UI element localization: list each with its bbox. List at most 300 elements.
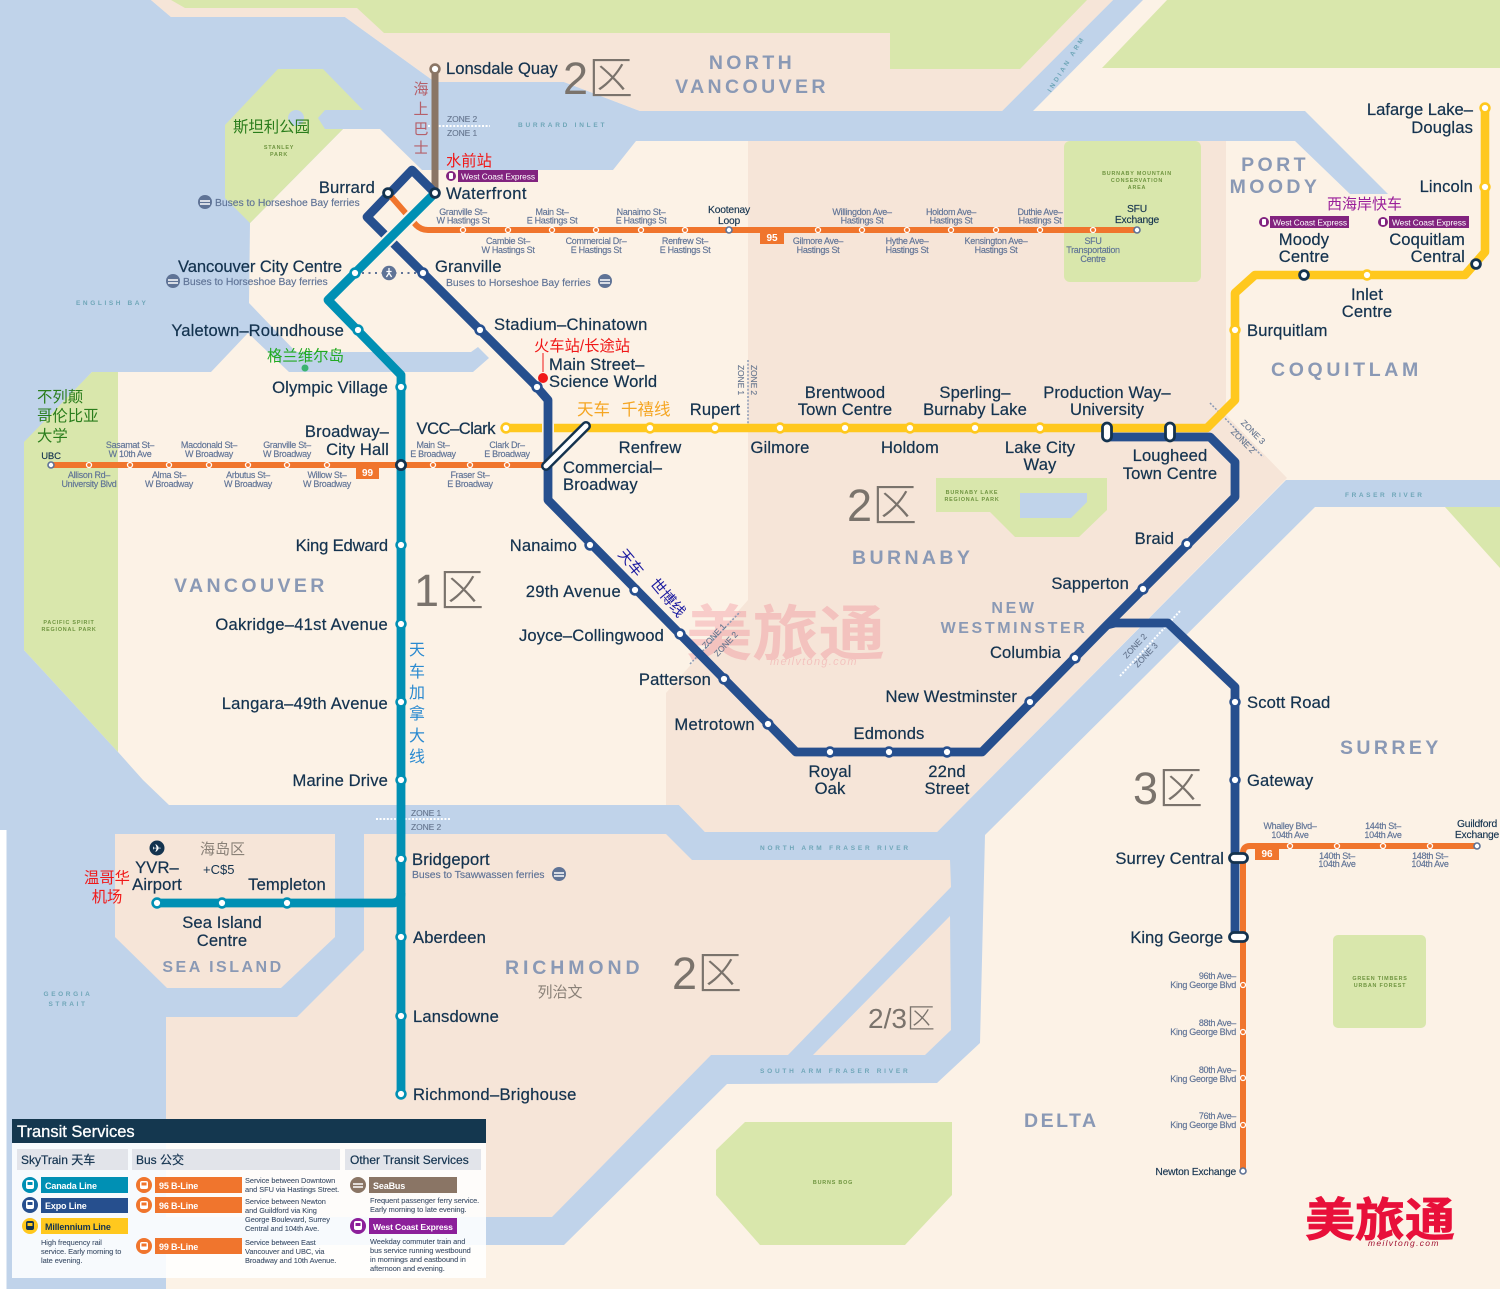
legend section headers: Other Transit Services [350,1153,469,1167]
park labels: REGIONAL PARK [944,497,1000,503]
stop labels: 95 B-Line: Hastings St [975,245,1018,255]
line name: Canada: 加 [409,684,425,702]
station names: Millennium Line: Inlet [1351,285,1383,304]
water labels: BURRARD INLET [518,122,607,129]
stations: Millennium [502,104,1489,432]
station names: Expo Line: Broadway [563,475,638,494]
route badges: 96 [1261,849,1273,860]
Chinese annotations: place names: 不列颠 [37,388,83,406]
station names: Millennium Line: Rupert [690,400,741,419]
Chinese annotation: SeaBus [413,81,429,157]
marker: Main Street train station [538,353,548,383]
zone labels: ZONE 1 [447,128,477,138]
stop labels: 95 B-Line: Renfrew St– [662,236,708,246]
line name: Millennium [577,400,670,419]
water labels: ENGLISH BAY [76,300,148,307]
station names: Expo Line: Metrotown [674,715,755,734]
zone labels: ZONE 3 [1239,418,1268,446]
station names: Canada Line: Olympic Village [272,378,388,397]
station names: Canada Line: YVR– [135,858,180,877]
Chinese annotations: place names: 大学 [37,427,68,445]
station: Commercial-Broadway capsule [546,426,586,466]
stop labels: 95 B-Line: E Hastings St [527,216,578,226]
station names: Canada Line: Bridgeport [412,850,490,869]
station: Lonsdale Quay terminal [431,65,439,73]
stop labels: 95 B-Line: Nanaimo St– [617,207,666,217]
legend section headers: Bus 公交 [136,1152,184,1167]
walking connection [362,266,416,280]
station names: Expo Line: Scott Road [1247,693,1330,712]
stop labels: 95 B-Line: W Hastings St [481,245,535,255]
legend: Bus: 95 B-Line [159,1181,198,1191]
stop labels: 99 B-Line: Granville St– [263,440,311,450]
zone labels: ZONE 3 [1132,640,1160,669]
line name: Millennium: 千禧线 [621,400,670,419]
Chinese annotations: place names: +C$5 [203,862,234,877]
crossing gap [378,207,421,250]
ferry bus notes: Buses to Horseshoe Bay ferries [183,277,328,288]
West Coast Express badges [446,170,1469,228]
station names: Canada Line: City Hall [326,440,389,459]
station names: Canada Line: Vancouver City Centre [178,257,342,276]
stop labels: 99 B-Line: Alma St– [152,470,186,480]
stop labels: 96 B-Line: 140th St– [1319,851,1355,861]
legend: Bus: Service between Downtown [245,1176,335,1185]
city district names: WESTMINSTER [941,620,1087,637]
stations: B-Line stops [86,228,1432,1128]
line: SeaBus [432,69,438,193]
stop labels: 99 B-Line: Fraser St– [450,470,490,480]
fare zone markers: 2/3区 [868,1003,935,1034]
stop labels: 99 B-Line: Allison Rd– [68,470,110,480]
station names: Expo Line: Science World [549,372,657,391]
park labels: AREA [1128,185,1146,191]
legend: SkyTrain: Canada Line [45,1181,97,1191]
station names: Millennium Line: Douglas [1411,118,1473,137]
station names: Expo Line [319,178,1330,947]
city district names: NEW [991,600,1037,617]
stop labels: 99 B-Line: Willow St– [307,470,347,480]
station names: Expo Line: Granville [435,257,502,276]
stop labels: 95 B-Line: Gilmore Ave– [793,236,843,246]
legend: other services: Frequent passenger ferry service. [370,1196,479,1205]
stop labels: 99 B-Line: W Broadway [224,479,273,489]
water labels: STRAIT [48,1001,88,1008]
city district names: COQUITLAM [1271,359,1422,381]
stop labels: 95 B-Line: Centre [1080,254,1106,264]
Chinese annotations: place names: 格兰维尔岛 [267,347,344,365]
line: Millennium [506,108,1485,428]
legend: Bus: and SFU via Hastings Street. [245,1185,339,1194]
zone labels: ZONE 1 [411,808,441,818]
park labels: STANLEY [264,145,294,151]
station names: Canada Line: Sea Island [182,913,262,932]
line: Expo [367,170,1235,937]
park labels: PACIFIC SPIRIT [43,620,95,626]
station names: Expo Line: Town Centre [1123,464,1217,483]
station names: Canada Line: Airport [132,875,182,894]
stop labels: 96 B-Line: King George Blvd [1170,1027,1236,1037]
zone labels: ZONE 2 [447,114,477,124]
route badges [356,231,1279,860]
municipal land: darker districts [115,0,1287,1217]
stop labels: 96 B-Line: King George Blvd [1170,1074,1236,1084]
stop labels: 95 B-Line: Cambie St– [486,236,530,246]
station names: Canada Line: Templeton [248,875,326,894]
stop labels: 96 B-Line: 104th Ave [1271,830,1309,840]
zone labels: ZONE 2 [1229,427,1258,455]
city district names: VANCOUVER [675,76,829,98]
station names: Millennium Line: Centre [1342,302,1392,321]
water labels: GEORGIA [44,991,92,998]
park labels: CONSERVATION [1111,178,1163,184]
water labels: NORTH ARM FRASER RIVER [760,845,911,852]
station names: Expo Line: Burrard [319,178,375,197]
marker: Granville Island [302,364,308,372]
Chinese annotation: SeaBus: 海 [413,81,429,98]
stop labels: 95 B-Line: Kootenay [708,205,751,216]
stop labels: 95 B-Line: Hastings St [886,245,929,255]
line name: Canada: 大 [409,727,425,745]
station names: Millennium Line: Way [1024,455,1057,474]
Chinese annotation: SeaBus: 士 [413,140,429,157]
city district names: RICHMOND [505,957,643,979]
zone labels [411,114,1268,832]
stop labels: 95 B-Line: Transportation [1066,245,1120,255]
zone labels: ZONE 1 [700,621,728,650]
stations: interchanges [384,189,1480,942]
legend heading [12,1119,486,1143]
city district names [162,52,1442,1132]
legend: Bus: George Boulevard, Surrey [245,1215,330,1224]
city district names: SEA ISLAND [162,959,284,976]
station names: Millennium Line: Lake City [1005,438,1076,457]
logo: 美旅通 [1305,1194,1455,1246]
station names: Canada Line: Lansdowne [413,1007,499,1026]
station names: Millennium Line: Production Way– [1043,383,1171,402]
stop labels: 96 B-Line: 148th St– [1412,851,1448,861]
line name: Expo: 世博线 [646,575,688,621]
legend: SkyTrain: Expo Line [45,1201,87,1211]
station names: Expo Line: King George [1130,928,1223,947]
stop labels: 99 B-Line [41,440,531,489]
fare zone markers: 2区 [672,948,742,999]
water labels: INDIAN ARM [1047,35,1087,94]
icon: airport plane: ✈ [152,842,162,855]
legend heading: Transit Services [17,1123,135,1141]
stop labels: 96 B-Line: 76th Ave– [1199,1111,1236,1121]
Chinese annotations: place names: 海岛区 [200,841,245,858]
station names: Expo Line: Oak [815,779,846,798]
station names: Expo Line: Patterson [639,670,711,689]
legend: SkyTrain: High frequency rail [41,1238,102,1247]
stop labels: 95 B-Line: E Hastings St [660,245,711,255]
water labels [44,35,1425,1075]
station names: Expo Line: Columbia [990,643,1062,662]
icon: airport plane [150,840,164,856]
station names: Canada Line: Centre [197,931,247,950]
legend: Bus: Service between Newton [245,1197,326,1206]
stop labels: 95 B-Line: Duthie Ave– [1017,207,1063,217]
station names: Millennium Line: Coquitlam [1389,230,1465,249]
stop labels: 96 B-Line: 80th Ave– [1199,1065,1236,1075]
legend: Bus: Broadway and 10th Avenue. [245,1256,336,1265]
line name: Expo [614,546,688,621]
station names: Millennium Line: VCC–Clark [416,419,496,438]
station names: Millennium Line: Central [1411,247,1465,266]
stop labels: 96 B-Line: 96th Ave– [1199,971,1236,981]
station names: Expo Line: 29th Avenue [526,582,621,601]
legend: Bus: and Guildford via King [245,1206,317,1215]
stop labels: 96 B-Line: Exchange [1455,830,1500,841]
legend: other services [350,1177,479,1273]
stop labels: 95 B-Line: SFU [1127,204,1147,215]
fare zone markers: 2区 [847,480,917,531]
stop labels: 95 B-Line: Holdom Ave– [926,207,976,217]
stop labels: 95 B-Line: Exchange [1115,215,1160,226]
stop labels: 96 B-Line: 104th Ave [1411,859,1449,869]
legend: Bus [136,1176,339,1265]
line name: Expo: 天车 [614,546,647,580]
line: Canada [157,193,435,1094]
station names: Millennium Line: Burquitlam [1247,321,1328,340]
station names: Canada Line: Broadway– [305,422,390,441]
station names: Millennium Line: Lincoln [1420,177,1473,196]
station names: Canada Line: Marine Drive [292,771,388,790]
station names: Expo Line: Commercial– [563,458,663,477]
legend: other services: West Coast Express [373,1222,453,1232]
station names: Millennium Line: University [1070,400,1145,419]
West Coast Express badges: West Coast Express [1273,218,1347,228]
line name: Millennium: 天车 [577,400,610,419]
stop labels: 96 B-Line: Whalley Blvd– [1263,821,1317,831]
city district names: VANCOUVER [174,575,328,597]
Chinese annotation: SeaBus: 巴 [413,121,429,138]
station names: Canada Line: Lonsdale Quay [446,59,558,78]
station names: Millennium Line: Renfrew [619,438,682,457]
Chinese annotations: place names: 温哥华 [84,870,130,887]
ferry bus notes: Buses to Horseshoe Bay ferries [446,278,591,289]
stop labels: 99 B-Line: W Broadway [185,449,234,459]
station names: Millennium Line: Sperling– [939,383,1011,402]
zone labels: ZONE 2 [1121,631,1149,660]
station names: Expo Line: Lougheed [1133,446,1207,465]
ferry bus notes [183,198,591,881]
park labels: REGIONAL PARK [41,627,97,633]
station names: Expo Line: Joyce–Collingwood [519,626,664,645]
station names: Millennium Line: Gilmore [751,438,809,457]
Chinese annotations: place names: 机场 [92,889,122,906]
stop labels: 95 B-Line: Hastings St [841,216,884,226]
zone boundaries [376,126,1263,819]
station names: Canada Line: Richmond–Brighouse [413,1085,577,1104]
Chinese annotations: place names: 水前站 [446,153,492,170]
stop labels: 99 B-Line: Sasamat St– [106,440,154,450]
zone labels: ZONE 2 [411,822,441,832]
legend: other services: Early morning to late evening. [370,1205,467,1214]
station names: Millennium Line: Brentwood [805,383,885,402]
stop labels: 95 B-Line: Commercial Dr– [566,236,627,246]
Chinese annotations: place names: 西海岸快车 [1327,196,1402,213]
stop labels: 96 B-Line [1155,819,1500,1178]
legend: Bus: 96 B-Line [159,1201,198,1211]
stop labels: 96 B-Line: 104th Ave [1318,859,1356,869]
city district names: BURNABY [852,547,973,569]
station names: Millennium Line: Centre [1279,247,1329,266]
station names: Expo Line: New Westminster [885,687,1017,706]
Chinese annotations: place names [37,118,1402,906]
legend: other services: Weekday commuter train and [370,1237,465,1246]
fare zone markers: 1区 [414,565,484,616]
station names: Expo Line: Sapperton [1051,574,1129,593]
West Coast Express badges: West Coast Express [1392,218,1466,228]
line name: Canada [409,642,425,766]
stop labels: 95 B-Line: Willingdon Ave– [832,207,892,217]
stop labels: 95 B-Line: E Hastings St [571,245,622,255]
stop labels: 96 B-Line: King George Blvd [1170,980,1236,990]
stop labels: 96 B-Line: King George Blvd [1170,1120,1236,1130]
stop labels: 99 B-Line: W Broadway [145,479,194,489]
stop labels: 95 B-Line: Loop [718,216,741,227]
station names: Canada Line: Langara–49th Avenue [222,694,388,713]
park labels: BURNABY MOUNTAIN [1102,171,1172,177]
station names: Millennium Line: Burnaby Lake [923,400,1027,419]
line name: Canada: 线 [409,748,425,766]
legend: Bus: 99 B-Line [159,1242,198,1252]
stop labels: 96 B-Line: 104th Ave [1364,830,1402,840]
zone labels: ZONE 1 [736,365,746,395]
stop labels: 99 B-Line: E Broadway [410,449,457,459]
stop labels: 99 B-Line: W Broadway [263,449,312,459]
stop labels: 96 B-Line: Newton Exchange [1155,1167,1236,1178]
water labels: FRASER RIVER [1345,492,1425,499]
stop labels: 99 B-Line: Macdonald St– [181,440,237,450]
West Coast Express badges: West Coast Express [461,172,535,182]
station names: Expo Line: Waterfront [446,184,527,203]
station names: Expo Line: Main Street– [549,355,645,374]
legend: other services: afternoon and evening. [370,1264,445,1273]
left margin strip [0,830,6,1289]
Chinese annotations: place names: 火车站/长途站 [534,338,630,355]
park labels: BURNS BOG [813,1180,853,1186]
legend section headers: SkyTrain 天车 [21,1152,95,1167]
stop labels: 95 B-Line: Hastings St [797,245,840,255]
station names: Expo Line: Gateway [1247,771,1314,790]
stop labels: 99 B-Line: W Broadway [303,479,352,489]
station names: Expo Line: Nanaimo [510,536,577,555]
lake and lagoon [288,110,1087,518]
station names: Canada Line: Oakridge–41st Avenue [215,615,388,634]
station names: Expo Line: Royal [808,762,852,781]
legend: Bus: Service between East [245,1238,316,1247]
legend: other services: bus service running westbound [370,1246,471,1255]
park labels: BURNABY LAKE [946,490,998,496]
Chinese annotations: place names: 哥伦比亚 [37,407,99,425]
legend: other services: in mornings and eastbound in [370,1255,466,1264]
route badges: 95 [766,233,778,244]
stop labels: 95 B-Line: Main St– [535,207,569,217]
line name: Canada: 天 [409,642,425,659]
stations: Canada [153,269,405,1098]
fare zone markers: 3区 [1133,763,1203,814]
stop labels: 95 B-Line [436,204,1160,264]
station names: Millennium Line: Lafarge Lake– [1367,100,1474,119]
watermark: 美旅通 [686,601,885,668]
fare zone markers: 2区 [563,53,633,104]
ferry bus notes: Buses to Tsawwassen ferries [412,870,544,881]
legend: SkyTrain: late evening. [41,1256,82,1265]
legend: SkyTrain [22,1177,128,1265]
station names: Canada Line: Aberdeen [413,928,486,947]
city district names: 列治文 [537,984,583,1001]
Chinese annotations: place names: 斯坦利公园 [233,118,310,136]
station names: Expo Line: Edmonds [854,724,924,743]
line name: Canada: 车 [409,663,425,681]
stop labels: 95 B-Line: Hastings St [1019,216,1062,226]
line: 96 B-Line [1243,846,1476,1171]
line name: Canada: 拿 [409,704,425,723]
city district names: MOODY [1230,176,1320,198]
city district names: PORT [1241,154,1309,176]
stop labels: 95 B-Line: W Hastings St [436,216,490,226]
stop labels: 99 B-Line: University Blvd [61,479,117,489]
station names: Canada Line: Yaletown–Roundhouse [171,321,344,340]
legend: SkyTrain: Millennium Line [45,1222,111,1232]
legend section headers [17,1149,481,1170]
stop labels: 99 B-Line: Main St– [416,440,450,450]
stop labels: 95 B-Line: Kensington Ave– [965,236,1028,246]
station names: Canada Line: King Edward [296,536,388,555]
park labels: GREEN TIMBERS [1352,976,1408,982]
ferry icons [166,195,612,881]
station names: Expo Line: Street [924,779,970,798]
city district names: NORTH [709,52,795,74]
line: 95 B-Line [388,193,1137,230]
zone labels: ZONE 2 [712,629,740,658]
park labels: PARK [270,152,288,158]
stop labels: 99 B-Line: E Broadway [484,449,531,459]
stop labels: 99 B-Line: UBC [41,451,61,462]
stop labels: 99 B-Line: W 10th Ave [109,449,152,459]
stop labels: 96 B-Line: 88th Ave– [1199,1018,1236,1028]
city district names: SURREY [1340,737,1442,759]
stop labels: 99 B-Line: Arbutus St– [226,470,270,480]
stop labels: 95 B-Line: Hastings St [930,216,973,226]
park labels: URBAN FOREST [1354,983,1406,989]
stop labels: 96 B-Line: 144th St– [1365,821,1401,831]
panel: legend Transit Services [12,1119,486,1278]
station names: Expo Line: Stadium–Chinatown [494,315,648,334]
stop labels: 99 B-Line: Clark Dr– [489,440,525,450]
station names: Expo Line: 22nd [928,762,966,781]
Chinese annotation: SeaBus: 上 [413,101,429,118]
station names: Expo Line: Surrey Central [1115,849,1224,868]
line: 99 B-Line [51,462,548,468]
city district names: DELTA [1024,1110,1099,1132]
station names: Canada Line [132,59,577,1104]
legend: SkyTrain: service. Early morning to [41,1247,121,1256]
park labels [41,145,1408,1186]
station names: Expo Line: Braid [1135,529,1174,548]
fare zone markers [414,53,1203,1034]
route badges: 99 [362,468,373,479]
station names: Millennium Line: Town Centre [798,400,892,419]
stop labels: 99 B-Line: E Broadway [447,479,494,489]
station names: Millennium Line [416,100,1474,474]
stations: Expo [419,269,1239,784]
stations: B-Line terminals [48,227,1480,1174]
zone labels: ZONE 2 [749,365,759,395]
